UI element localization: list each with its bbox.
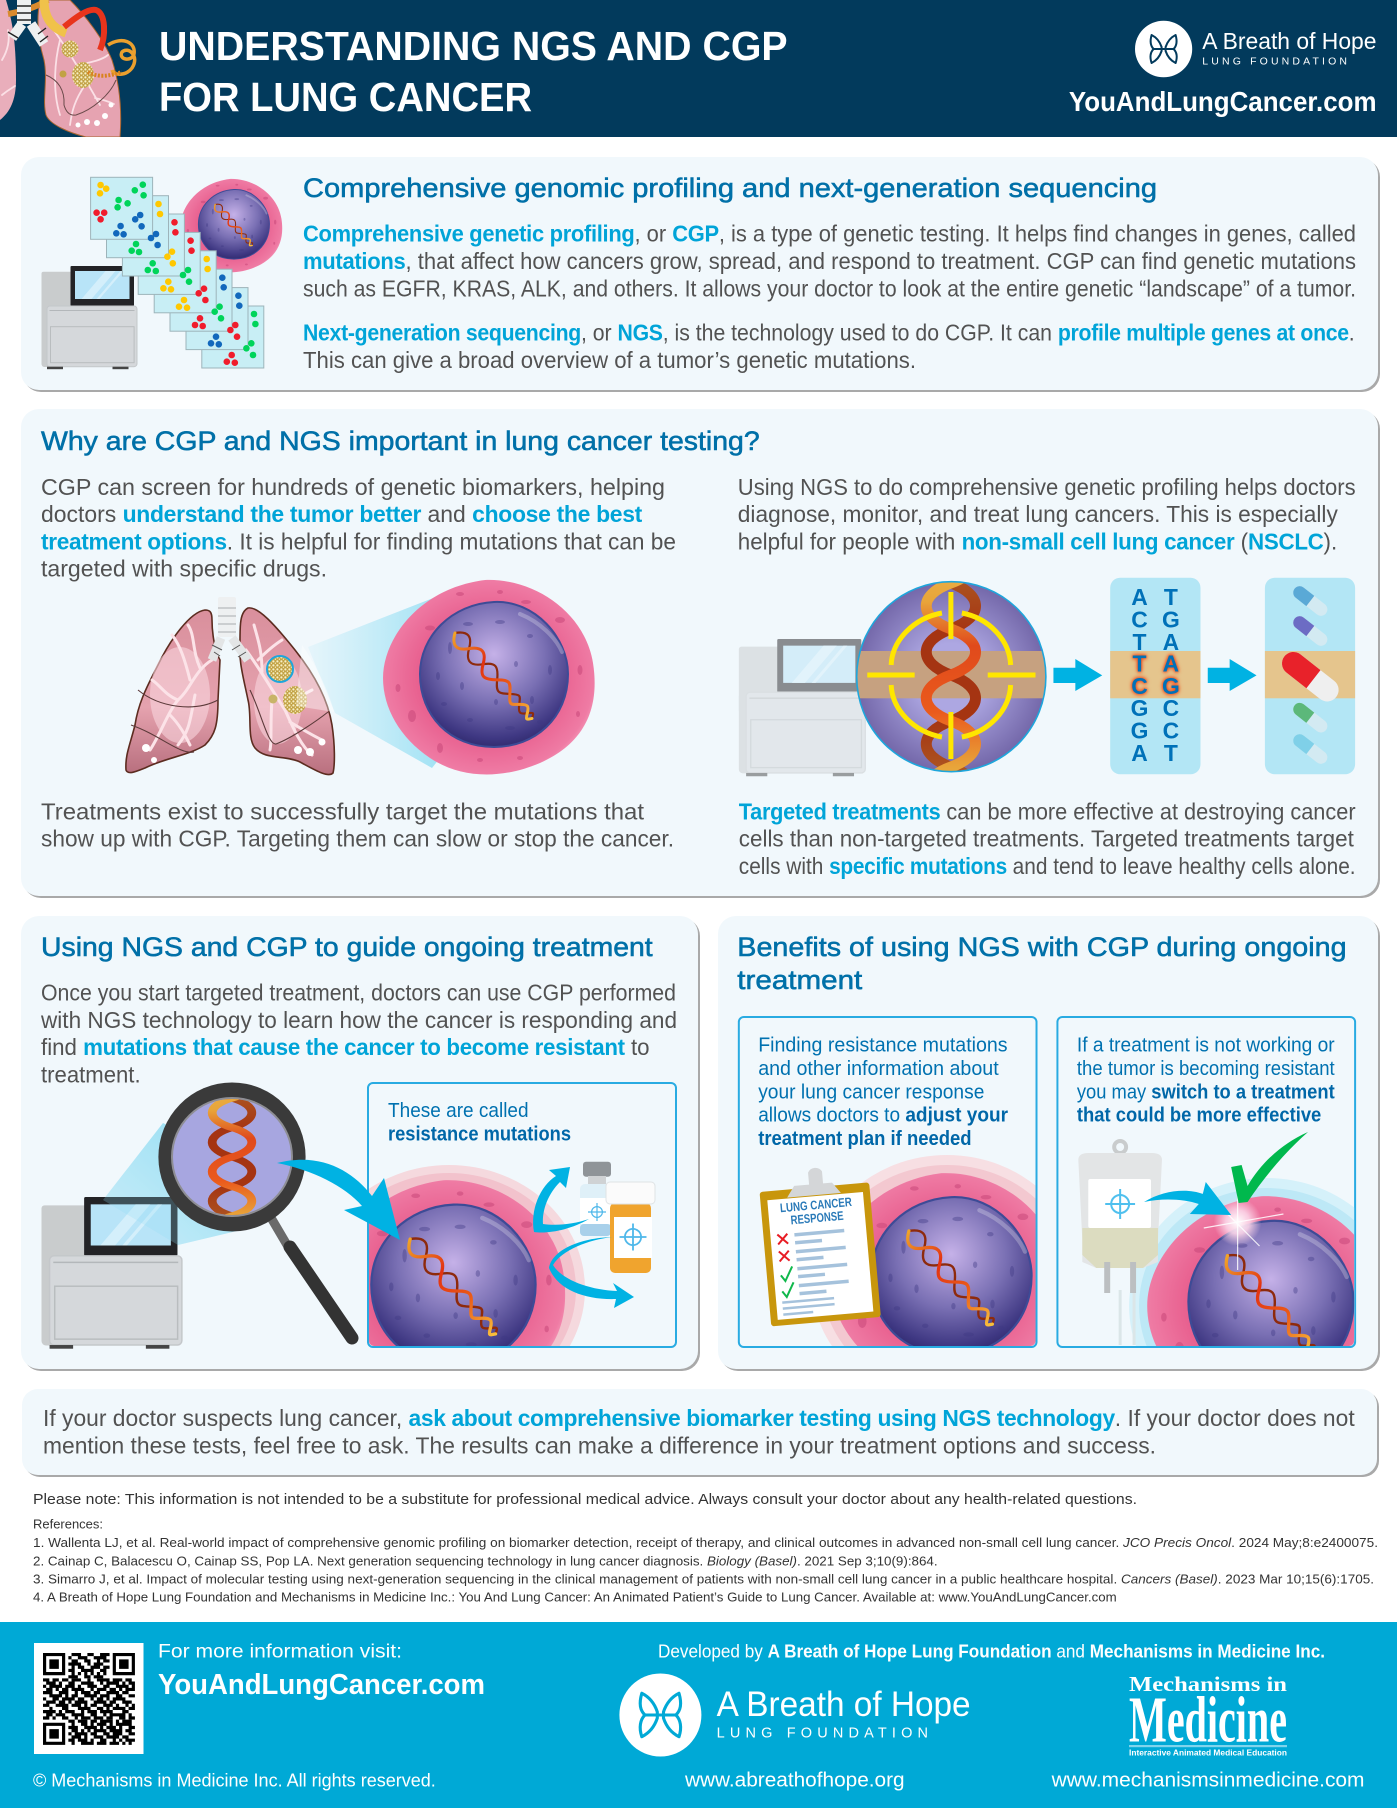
text: left intro: treatment options. It is helpful for finding mutations that can be xyxy=(41,529,676,555)
heading: Why are CGP and NGS important in lung cancer testing? xyxy=(41,426,760,456)
text: left intro: CGP can screen for hundreds of genetic biomarkers, helping xyxy=(41,474,665,500)
website: mechanismsinmedicine: www.mechanismsinmedicine.com xyxy=(1051,1770,1364,1792)
references: References: xyxy=(33,1518,103,1532)
title: FOR LUNG CANCER xyxy=(159,74,532,120)
logo: A Breath of Hope: A Breath of Hope xyxy=(1202,28,1376,54)
references: 1. Wallenta LJ, et al. Real-world impact of comprehensive genomic profiling on biomarker detection, receipt of therapy, and clinical outcomes in advanced non-small cell lung cancer. JCO Precis Oncol . 2024 May;8:e2400075. xyxy=(33,1536,1378,1550)
card: adjust treatment plan: allows doctors to adjust your xyxy=(758,1105,1008,1127)
panel: guiding ongoing treatment xyxy=(21,916,700,1413)
text: intro: with NGS technology to learn how the cancer is responding and xyxy=(40,1007,677,1033)
text: left intro: targeted with specific drugs. xyxy=(41,556,327,582)
heading: Benefits of using NGS with CGP during ongoing xyxy=(737,932,1347,962)
card: adjust treatment plan: your lung cancer response xyxy=(758,1082,984,1104)
illustration: sequencer and magnifier xyxy=(42,1082,358,1349)
heading: Comprehensive genomic profiling and next-generation sequencing xyxy=(303,173,1157,203)
DNA letters column: A xyxy=(1131,584,1148,610)
text: NGS definition: Next-generation sequencing, or NGS, is the technology used to do CGP. It can profile multiple genes at once. xyxy=(303,320,1355,346)
DNA letters column: C xyxy=(1131,606,1148,632)
text: call to action: If your doctor suspects lung cancer, ask about comprehensive biomarker testing using NGS technology. If your doctor does not xyxy=(43,1405,1355,1431)
illustration: lungs magnified to cell xyxy=(126,580,595,775)
panel: why CGP and NGS are important xyxy=(21,409,1380,898)
illustration: sequencer and target DNA xyxy=(738,580,1047,776)
logo: A Breath of Hope: A Breath of Hope xyxy=(717,1685,971,1724)
text: right intro xyxy=(738,474,1356,555)
lungs xyxy=(126,597,334,775)
DNA letters column: G xyxy=(1162,673,1180,699)
text: call to action xyxy=(43,1405,1355,1459)
card: adjust treatment plan: Finding resistance mutations xyxy=(758,1035,1008,1057)
callout: resistance mutations xyxy=(367,1082,677,1348)
title xyxy=(159,23,788,120)
card: switch treatment: the tumor is becoming resistant xyxy=(1077,1058,1335,1080)
logo: Mechanisms in Medicine: Mechanisms in xyxy=(1129,1672,1287,1696)
QR code xyxy=(34,1643,144,1754)
icon: vial xyxy=(580,1162,611,1236)
header website: YouAndLungCancer.com xyxy=(1069,86,1376,117)
logo: Mechanisms in Medicine xyxy=(1129,1672,1287,1758)
panel: comprehensive genomic profiling xyxy=(21,157,1380,392)
disclaimer note: Please note: This information is not intended to be a substitute for professional medical advice. Always consult your doctor about any health-related questions. xyxy=(33,1492,1137,1508)
icon: IV bag xyxy=(1078,1141,1162,1345)
arrow xyxy=(1053,659,1102,691)
logo: Mechanisms in Medicine: Medicine xyxy=(1129,1684,1287,1757)
arrow xyxy=(1208,659,1257,691)
logo: Mechanisms in Medicine: Interactive Animated Medical Education xyxy=(1129,1749,1287,1758)
arrow: drug to cell xyxy=(1144,1182,1231,1215)
text: treatments exist: show up with CGP. Targeting them can slow or stop the cancer. xyxy=(41,826,674,852)
text: more information: YouAndLungCancer.com xyxy=(158,1669,485,1701)
arrow: magnifier to cell xyxy=(277,1160,400,1240)
illustration: sequencer, slides and cell xyxy=(42,177,282,369)
title: UNDERSTANDING NGS AND CGP xyxy=(159,23,788,69)
references: 4. A Breath of Hope Lung Foundation and Mechanisms in Medicine Inc.: You And Lung Cancer: An Animated Patient’s Guide to Lung Cancer. Available at: www.YouAndLungCancer.com xyxy=(33,1591,1117,1605)
icon: green check mark xyxy=(1231,1132,1308,1203)
callout: resistance mutations: resistance mutations xyxy=(388,1124,571,1146)
card: adjust treatment plan: and other information about xyxy=(758,1058,999,1080)
DNA letters column: T xyxy=(1133,629,1147,655)
card: adjust treatment plan: treatment plan if needed xyxy=(758,1128,972,1150)
card: switch treatment: that could be more effective xyxy=(1077,1105,1321,1127)
text: right intro: helpful for people with non-small cell lung cancer (NSCLC). xyxy=(738,529,1337,555)
text: targeted treatments: cells than non-targeted treatments. Targeted treatments target xyxy=(739,826,1354,852)
DNA letters column: A xyxy=(1163,629,1179,655)
text: NGS definition xyxy=(303,320,1355,373)
references: 2. Cainap C, Balacescu O, Cainap SS, Pop LA. Next generation sequencing technology in lung cancer diagnosis. Biology (Basel) . 2021 Sep 3;10(9):864. xyxy=(33,1554,938,1568)
icon: clipboard response checklist xyxy=(758,1163,881,1326)
DNA letters column xyxy=(1110,578,1200,774)
text: CGP definition: Comprehensive genetic profiling, or CGP, is a type of genetic testing. It helps find changes in genes, called xyxy=(303,221,1356,247)
heading: Using NGS and CGP to guide ongoing treatment xyxy=(41,932,653,962)
card: adjust treatment plan xyxy=(738,1016,1038,1348)
copyright: © Mechanisms in Medicine Inc. All rights reserved. xyxy=(33,1771,436,1791)
callout: resistance mutations: These are called xyxy=(388,1100,529,1122)
icon: clipboard response checklist: RESPONSE xyxy=(790,1209,844,1227)
text: right intro: Using NGS to do comprehensive genetic profiling helps doctors xyxy=(738,474,1356,500)
card: switch treatment xyxy=(1056,1016,1356,1348)
panel: benefits of NGS with CGP xyxy=(0,916,1397,1808)
references: 3. Simarro J, et al. Impact of molecular testing using next-generation sequencing in the clinical management of patients with non-small cell lung cancer in a public healthcare hospital. Cancers (Basel) . 2023 Mar 10;15(6):1705. xyxy=(33,1573,1374,1587)
text: left intro: doctors understand the tumor better and choose the best xyxy=(41,501,643,527)
references xyxy=(33,1518,1378,1605)
text: CGP definition xyxy=(303,221,1356,301)
text: treatments exist xyxy=(41,798,674,852)
panel: ask your doctor xyxy=(22,1389,1379,1477)
DNA letters column: G xyxy=(1131,695,1148,721)
text: more information: For more information visit: xyxy=(158,1641,402,1663)
DNA letters column: C xyxy=(1163,695,1179,721)
illustration: lungs with DNA ribbon xyxy=(0,0,135,137)
DNA letters column: T xyxy=(1133,651,1147,677)
DNA letters column: G xyxy=(1162,606,1180,632)
text: intro: find mutations that cause the cancer to become resistant to xyxy=(41,1034,650,1060)
card: switch treatment: you may switch to a treatment xyxy=(1077,1082,1335,1104)
heading: treatment xyxy=(737,965,863,995)
text: NGS definition: This can give a broad overview of a tumor’s genetic mutations. xyxy=(303,347,916,373)
DNA letters column: C xyxy=(1131,673,1148,699)
text: developed by: Developed by A Breath of Hope Lung Foundation and Mechanisms in Medicine Inc. xyxy=(658,1642,1325,1662)
logo: A Breath of Hope: LUNG FOUNDATION xyxy=(717,1726,928,1742)
text: intro: treatment. xyxy=(41,1062,141,1088)
arrow: drug blocked upward xyxy=(533,1167,589,1232)
header band xyxy=(0,0,1397,137)
text: call to action: mention these tests, feel free to ask. The results can make a difference in your treatment options and success. xyxy=(43,1433,1156,1459)
DNA letters column: T xyxy=(1164,740,1178,766)
heading xyxy=(737,932,1347,995)
text: targeted treatments: Targeted treatments can be more effective at destroying cancer xyxy=(739,798,1356,824)
DNA letters column: T xyxy=(1164,584,1178,610)
text: CGP definition: mutations, that affect how cancers grow, spread, and respond to treatment. CGP can find genetic mutations xyxy=(303,248,1356,274)
website: abreathofhope: www.abreathofhope.org xyxy=(684,1770,905,1792)
text: intro: Once you start targeted treatment, doctors can use CGP performed xyxy=(41,980,676,1006)
card: switch treatment: If a treatment is not working or xyxy=(1077,1035,1335,1057)
text: intro xyxy=(40,980,677,1088)
icon: pill bottle xyxy=(606,1182,655,1273)
DNA letters column: A xyxy=(1163,651,1179,677)
logo: A Breath of Hope: LUNG FOUNDATION xyxy=(1202,56,1347,68)
text: more information xyxy=(158,1641,485,1701)
text: targeted treatments: cells with specific mutations and tend to leave healthy cells alone. xyxy=(739,853,1356,879)
DNA letters column: C xyxy=(1163,717,1179,743)
logo: A Breath of Hope xyxy=(619,1674,971,1756)
DNA letters column: A xyxy=(1131,740,1148,766)
text: targeted treatments xyxy=(739,798,1356,879)
icon: clipboard response checklist: LUNG CANCER xyxy=(779,1195,852,1215)
pills column xyxy=(1265,578,1355,774)
text: right intro: diagnose, monitor, and treat lung cancers. This is especially xyxy=(738,501,1338,527)
arrow: drug blocked downward xyxy=(549,1237,634,1308)
DNA letters column: G xyxy=(1131,717,1148,743)
text: left intro xyxy=(41,474,676,582)
text: treatments exist: Treatments exist to successfully target the mutations that xyxy=(41,798,645,824)
footer band xyxy=(0,1622,1397,1808)
logo: A Breath of Hope xyxy=(1135,21,1376,77)
